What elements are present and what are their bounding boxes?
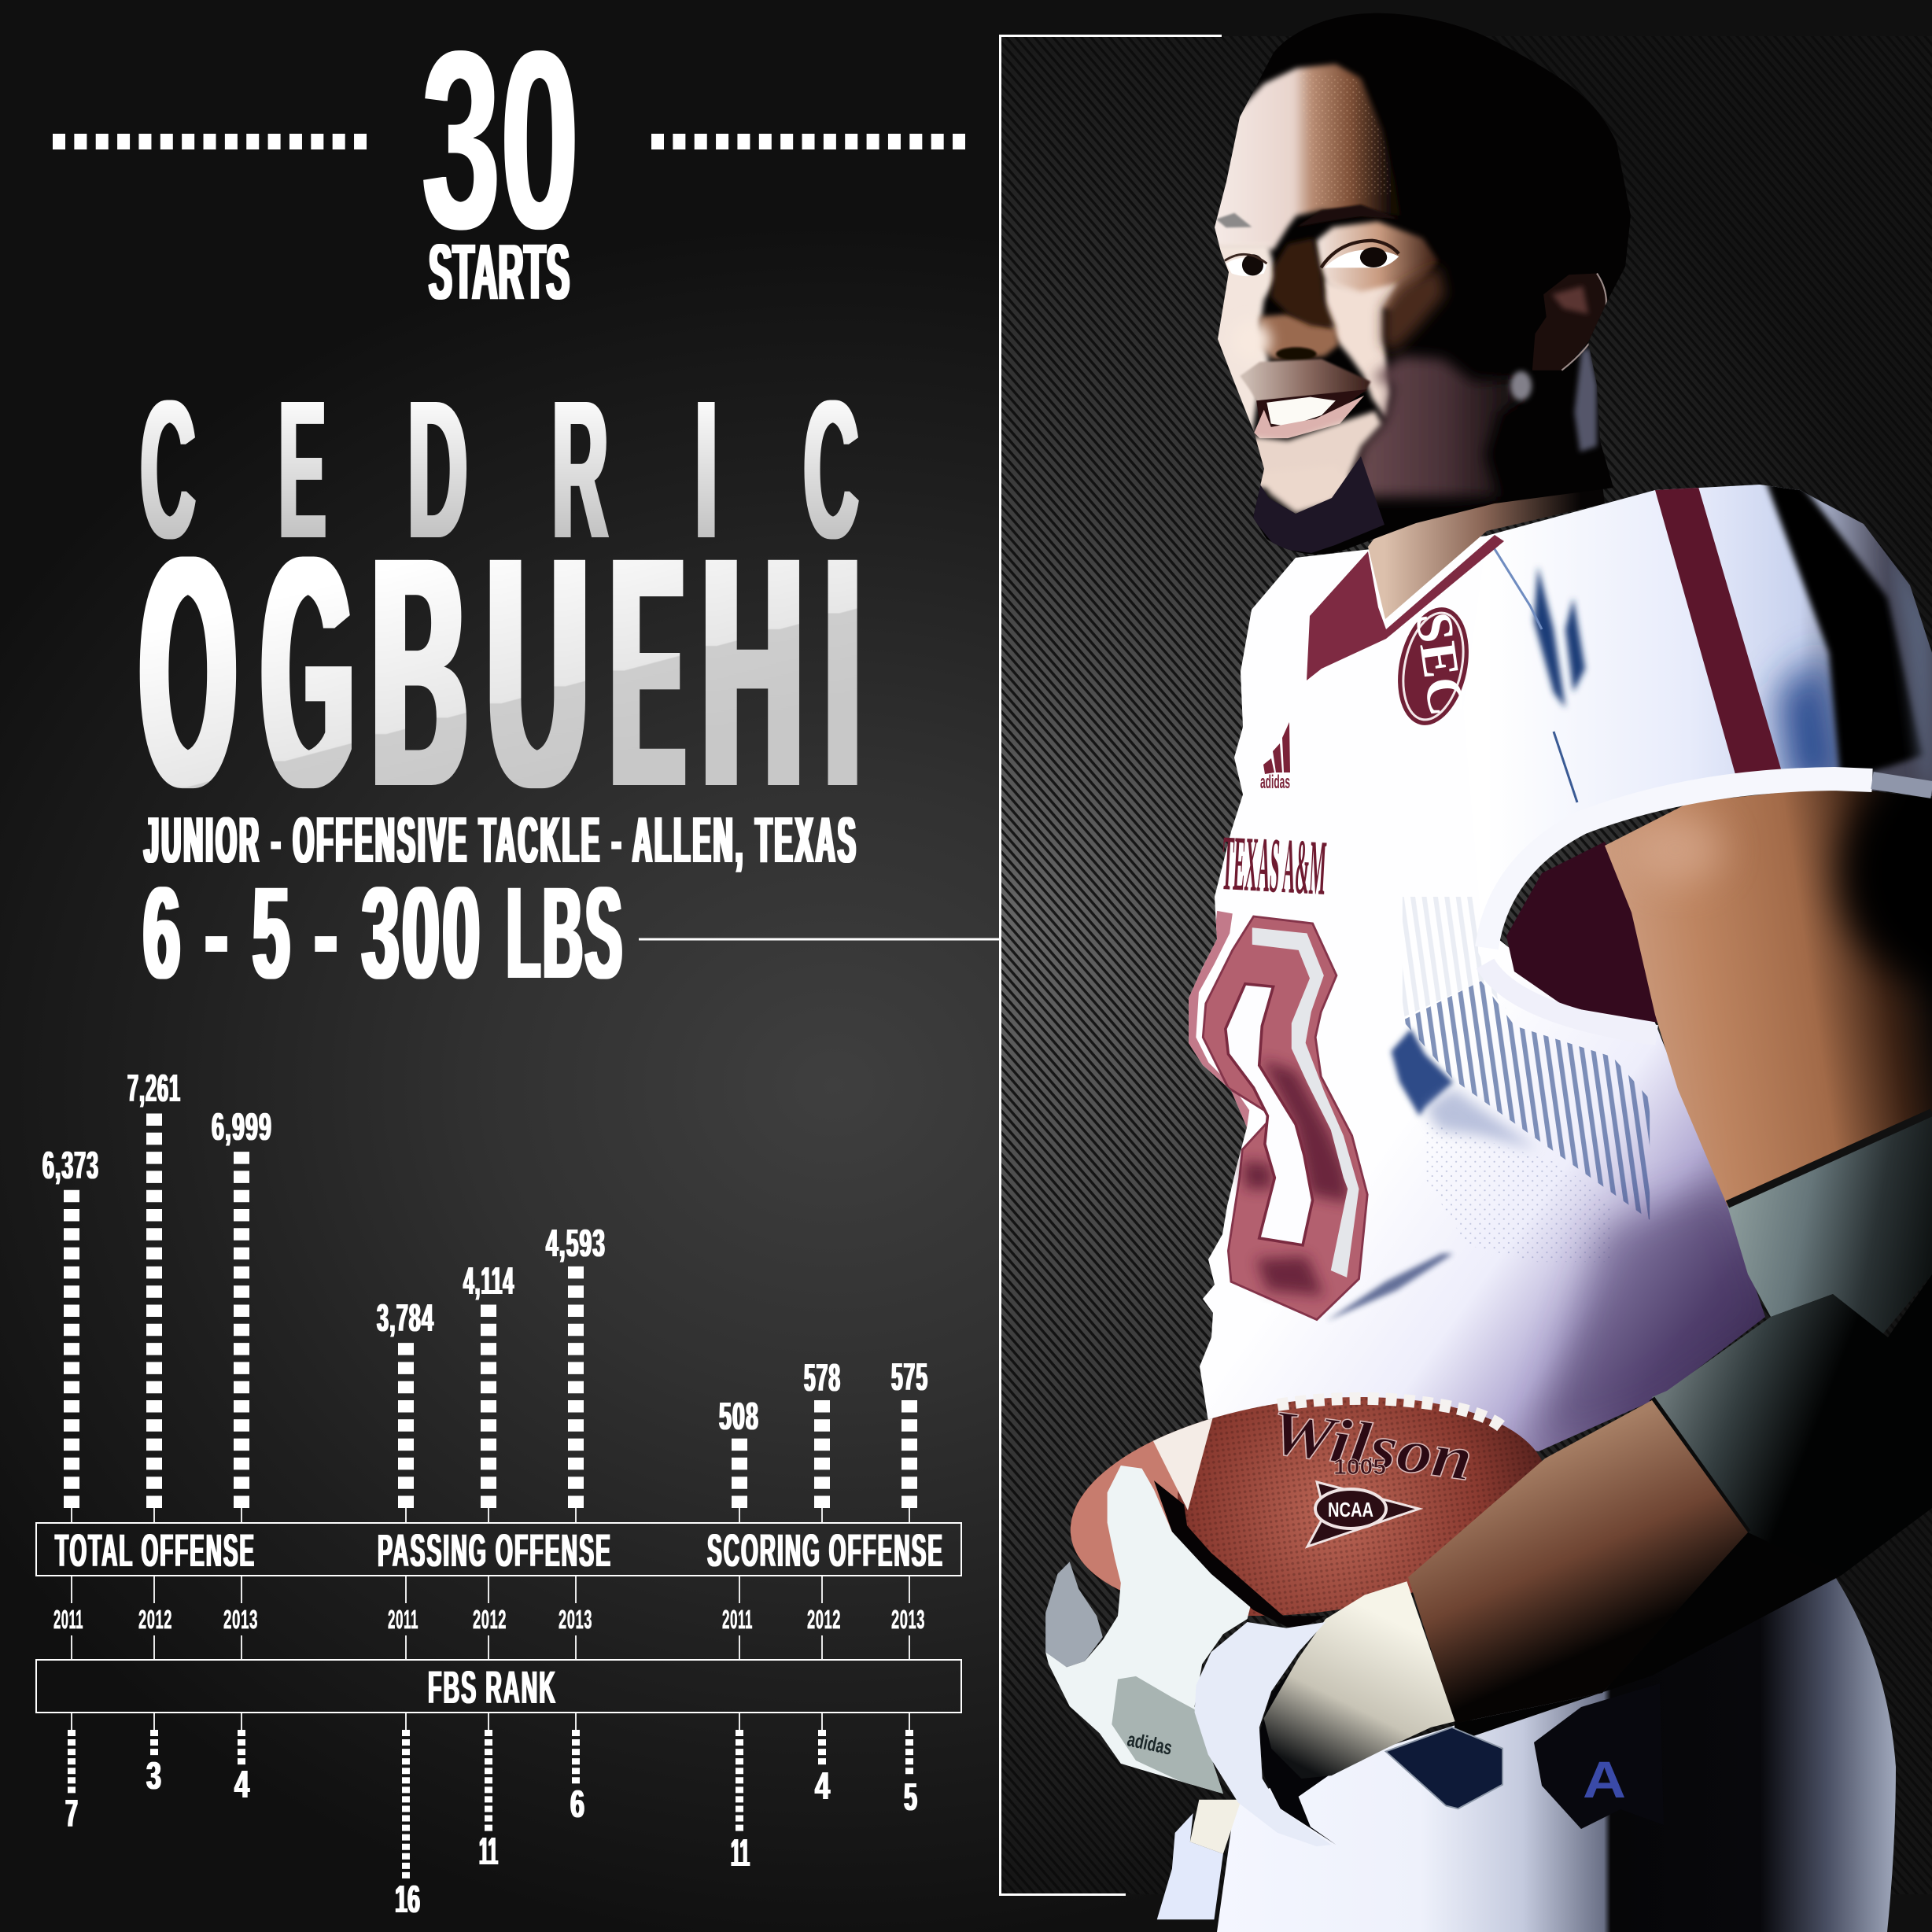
right brow <box>1296 205 1400 227</box>
upper arm <box>1605 763 1932 1206</box>
glove logo: adidas <box>1125 1728 1174 1760</box>
year labels: 2011 <box>722 1605 753 1634</box>
FBS rank values: 11 <box>731 1832 750 1875</box>
FBS rank values: 4 <box>815 1765 830 1808</box>
year labels: 2013 <box>559 1605 592 1634</box>
connector line from measurements to frame <box>639 938 1001 941</box>
nostril <box>1276 347 1317 361</box>
mouth <box>1256 389 1367 430</box>
jersey collar <box>1307 535 1504 680</box>
thumb <box>1045 1561 1103 1667</box>
pants: A <box>1583 1750 1626 1808</box>
shadow under fingers <box>1154 1480 1325 1631</box>
decorative dashes: left of starts count <box>53 134 367 149</box>
title: last name: H <box>702 489 803 855</box>
text: JUNIOR - OFFENSIVE TACKLE - ALLEN, TEXAS <box>144 803 858 876</box>
stubble on cheek <box>1350 356 1524 496</box>
player photo illustration <box>1045 13 1932 1932</box>
year labels: 2013 <box>891 1605 925 1634</box>
ear <box>1532 273 1608 371</box>
football model number: 1005 <box>1333 1455 1386 1479</box>
elbow sleeve <box>1652 1112 1932 1576</box>
forearm <box>1408 1400 1748 1724</box>
chart value labels: 575 <box>891 1356 928 1399</box>
text: LBS <box>507 861 625 1006</box>
glove <box>1045 1466 1250 1794</box>
dark underarm mass <box>1455 1479 1932 1742</box>
glove palm patch <box>1112 1676 1223 1794</box>
sock and tape at lower left <box>1157 1800 1241 1919</box>
frame: white bracket around player <box>1001 36 1222 1894</box>
category labels <box>55 1525 944 1576</box>
title: first name: I <box>695 359 718 579</box>
chart value labels: 578 <box>804 1357 841 1399</box>
FBS rank values: 3 <box>146 1755 161 1797</box>
connector ticks between chart rows <box>72 1508 909 1730</box>
pants <box>1217 1576 1896 1932</box>
title: last name: E <box>611 489 684 855</box>
starts count: 30 <box>422 0 579 282</box>
category labels: PASSING OFFENSE <box>378 1525 612 1576</box>
chart value labels: 508 <box>719 1396 759 1438</box>
head <box>1198 13 1631 555</box>
SEC patch: SEC <box>1404 609 1476 720</box>
text: I <box>825 489 860 855</box>
jersey sleeve cuff band <box>1485 779 1932 1035</box>
lower lip <box>1254 396 1364 438</box>
title: last name <box>140 489 860 855</box>
FBS rank values: 5 <box>904 1776 917 1819</box>
year labels: 2012 <box>807 1605 841 1634</box>
teeth <box>1266 397 1336 426</box>
chart: FBS rank bars <box>72 1730 909 1879</box>
chart value labels: 3,784 <box>377 1297 434 1340</box>
title: last name: B <box>372 489 467 855</box>
FBS rank values: 11 <box>479 1831 498 1873</box>
jersey sleeve <box>1487 485 1932 887</box>
player height and weight: 6 - 5 - 300 <box>143 861 483 1006</box>
adidas logo on chest <box>1260 722 1290 793</box>
chart value labels: 6,999 <box>212 1106 272 1149</box>
FBS rank values: 6 <box>570 1783 584 1826</box>
FBS rank values <box>65 1755 917 1921</box>
title: first name: C <box>140 359 195 579</box>
player photo illustration: TEXAS A&M <box>1220 819 1328 912</box>
chart value labels <box>42 1067 928 1438</box>
chart value labels: 4,114 <box>463 1260 514 1303</box>
year labels: 2012 <box>473 1605 507 1634</box>
right eye <box>1321 241 1399 268</box>
decorative dashes: right of starts count <box>651 134 965 149</box>
nose bulb <box>1257 314 1338 359</box>
nose bridge shadow <box>1271 238 1336 328</box>
jersey number <box>1186 911 1367 1319</box>
left eye <box>1225 254 1266 276</box>
category labels: TOTAL OFFENSE <box>55 1525 256 1576</box>
nose tip <box>1232 320 1271 361</box>
left brow <box>1216 213 1252 227</box>
title: last name: G <box>262 489 353 855</box>
chin cream highlight <box>1261 466 1353 514</box>
neck highlight <box>1574 348 1597 452</box>
category label box <box>36 1523 961 1576</box>
NCAA pennant: NCAA <box>1328 1498 1373 1521</box>
left cheek <box>1218 242 1277 437</box>
chart value labels: 4,593 <box>546 1222 606 1265</box>
undershirt in arm hole <box>1506 842 1658 1023</box>
upper lip <box>1240 359 1370 402</box>
text: C <box>804 359 859 579</box>
year labels: 2013 <box>223 1605 258 1634</box>
beard <box>1253 456 1384 553</box>
cheek shadow <box>1384 267 1445 351</box>
jersey torso <box>1189 535 1778 1451</box>
glove cuff strap <box>1195 1622 1332 1846</box>
dark hook under cuff <box>1259 1658 1362 1845</box>
NCAA pennant <box>1307 1482 1419 1547</box>
forehead speckle <box>1299 72 1392 205</box>
title: first name: D <box>407 359 467 579</box>
year labels <box>53 1605 925 1634</box>
year labels: 2012 <box>138 1605 172 1634</box>
SEC patch <box>1388 601 1479 732</box>
title: first name: R <box>552 359 608 579</box>
panel: striped photo backdrop <box>1001 36 1932 1894</box>
hand, glove and wrist wrap <box>1045 1466 1502 1919</box>
title: first name <box>140 359 859 579</box>
title: last name: O <box>140 489 236 855</box>
FBS rank values: 7 <box>65 1793 78 1835</box>
player photo illustration: adidas <box>1260 772 1290 793</box>
starts count <box>422 0 579 316</box>
title: last name: U <box>487 489 588 855</box>
right eye surround <box>1316 221 1438 312</box>
wrist strap tail <box>1386 1727 1502 1808</box>
neck <box>1368 441 1605 619</box>
year labels: 2011 <box>388 1605 418 1634</box>
chin <box>1252 411 1381 488</box>
football <box>1070 1392 1542 1616</box>
FBS rank values: 4 <box>234 1764 249 1806</box>
FBS rank values: 16 <box>395 1879 420 1921</box>
chart value labels: 7,261 <box>127 1067 181 1110</box>
wrist wrap <box>1264 1581 1455 1779</box>
centre cheek highlight <box>1325 280 1397 418</box>
year labels: 2011 <box>53 1605 83 1634</box>
FBS rank box <box>36 1660 961 1713</box>
football laces <box>1278 1399 1506 1430</box>
text: STARTS <box>429 228 570 316</box>
title: first name: E <box>278 359 326 579</box>
text: FBS RANK <box>428 1662 557 1713</box>
text: SCORING OFFENSE <box>707 1525 944 1576</box>
chart: yardage and points bars <box>72 1114 909 1508</box>
jaw highlight <box>1510 371 1532 400</box>
chart value labels: 6,373 <box>42 1145 99 1187</box>
forehead <box>1198 64 1400 249</box>
football wordmark: Wilson <box>1266 1398 1477 1495</box>
